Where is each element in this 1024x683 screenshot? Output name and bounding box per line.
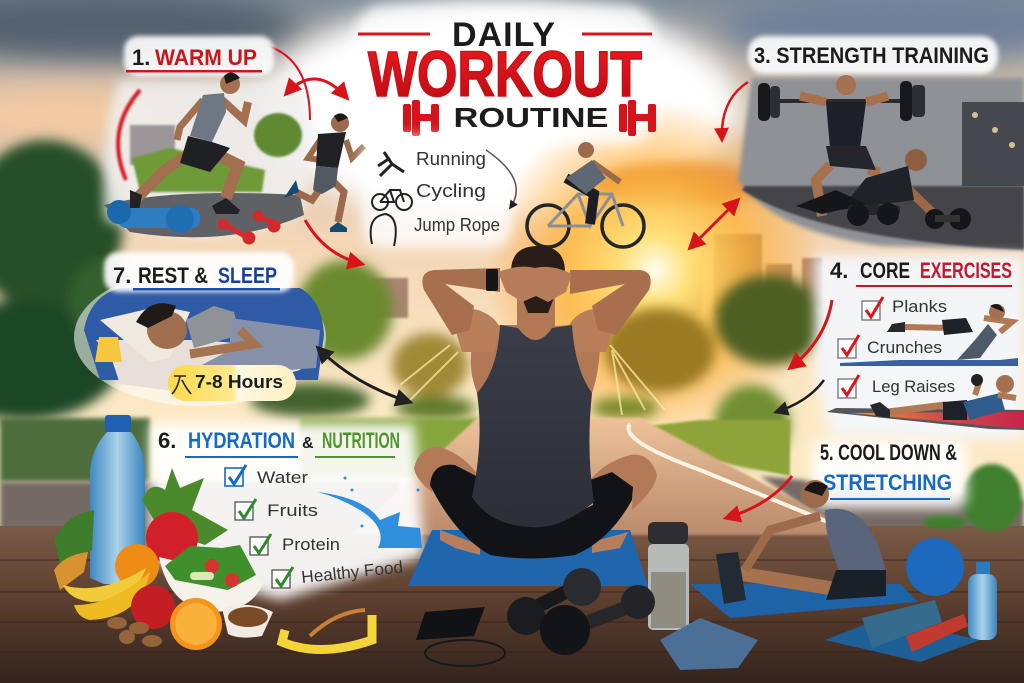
- watch: [486, 269, 498, 291]
- checklist: Crunches: [867, 338, 942, 357]
- icon: mat and towel roll: [825, 600, 980, 662]
- right arm: [570, 270, 651, 335]
- right plant: [923, 464, 1022, 532]
- heading: core exercises: 4.: [830, 258, 848, 283]
- icon: water splash: [318, 476, 422, 548]
- heading: hydration: 6.: [158, 428, 176, 453]
- grey road: [0, 476, 1024, 540]
- heading: core exercises: CORE: [860, 258, 910, 283]
- figure: barbell lifter: [758, 75, 925, 216]
- checklist: [838, 297, 955, 398]
- icon: earphones: [425, 640, 505, 666]
- ground deck: [0, 526, 1024, 683]
- icon: right dumbbell: [619, 100, 656, 136]
- figure: second runner: [284, 113, 364, 232]
- heading: hydration: HYDRATION: [188, 428, 295, 453]
- heading: warm up: [124, 36, 274, 76]
- figure: stretching athlete: [690, 480, 918, 618]
- walkway: [350, 418, 860, 535]
- legs: [414, 447, 480, 492]
- heading: core exercises: [830, 258, 1012, 287]
- cardio list: Running: [416, 149, 486, 169]
- checklist: Water: [257, 468, 308, 487]
- arrow: warm up to centre: [305, 220, 362, 264]
- icon: shaker bottle: [648, 522, 689, 630]
- distant buildings: [372, 234, 822, 318]
- figure: leg raises: [827, 374, 1024, 430]
- cardio list: [362, 136, 512, 248]
- icon: yoga mat: [107, 200, 200, 233]
- checklist: Protein: [282, 535, 340, 554]
- arrow: stretching: [726, 476, 792, 518]
- clasped hands: [498, 267, 572, 302]
- icon: jump rope: [371, 214, 396, 246]
- panel 4: core exercises: [815, 255, 1024, 440]
- panel 6: hydration and nutrition: [150, 424, 424, 600]
- heading: strength training: 3. STRENGTH TRAINING: [754, 43, 989, 68]
- heading: strength training: [748, 36, 998, 74]
- cardio list: Cycling: [416, 181, 486, 201]
- back and shoulders: [471, 296, 600, 393]
- heading: rest and sleep: REST &: [138, 263, 208, 288]
- heading: warm up: WARM UP: [155, 45, 257, 70]
- tank top: [472, 325, 594, 527]
- food pile: [54, 468, 273, 650]
- arrow: core upper: [790, 300, 832, 368]
- sun rays: [400, 345, 665, 415]
- arrow: warm up cycle: [286, 79, 347, 98]
- icon: dumbbells: [507, 568, 655, 655]
- heading: hydration: [158, 428, 400, 458]
- icon: exercise ball: [906, 538, 964, 596]
- icon: running: [378, 152, 404, 176]
- figure: crunches: [840, 304, 1018, 366]
- feet: [440, 530, 628, 555]
- arrow: strength to core: [690, 200, 738, 248]
- badge: 7-8 hours: 7-8 Hours: [195, 372, 283, 392]
- icon: small water bottle: [968, 562, 997, 640]
- arrow: cardio to centre: [486, 150, 516, 208]
- icon: lamp: [95, 337, 122, 362]
- figure: cyclist: [527, 142, 644, 247]
- checklist: Planks: [892, 297, 947, 316]
- panel 5: cool down and stretching: [812, 440, 967, 508]
- checklist: Leg Raises: [872, 377, 955, 396]
- grass: [0, 418, 150, 482]
- title: ROUTINE: [454, 102, 608, 133]
- figure: main runner: [130, 72, 248, 216]
- heading: warm up: 1.: [132, 45, 150, 70]
- checklist: Healthy Food: [300, 557, 404, 587]
- title: WORKOUT: [368, 38, 642, 110]
- panel 3: strength training: [722, 36, 1024, 250]
- head and hair: [511, 246, 565, 313]
- checklist: Fruits: [267, 501, 318, 520]
- heading: hydration: NUTRITION: [322, 428, 400, 453]
- icon: towel: [660, 618, 758, 670]
- figure: sleeper: [100, 303, 320, 382]
- panel 5: cool down and stretching: STRETCHING: [823, 470, 952, 495]
- cardio list: Jump Rope: [414, 215, 500, 235]
- left trees: [0, 140, 475, 420]
- heading: rest and sleep: SLEEP: [218, 263, 277, 288]
- figure: dumbbell row: [796, 149, 971, 230]
- badge: 7-8 hours: [168, 365, 296, 401]
- heading: hydration: &: [302, 435, 314, 452]
- icon: bicycle: [372, 190, 412, 210]
- panel 1: warm up: [104, 36, 312, 244]
- icon: smartphone: [416, 607, 485, 640]
- icon: measuring tape: [282, 610, 372, 650]
- arrow: sleep to centre: [318, 348, 410, 402]
- heading: rest and sleep: 7.: [113, 263, 131, 288]
- arrow: core lower: [776, 380, 824, 412]
- title: [355, 6, 656, 144]
- panel 5: cool down and stretching: 5. COOL DOWN &: [820, 440, 957, 465]
- yoga mat: [408, 530, 648, 586]
- title: DAILY: [452, 16, 556, 54]
- panel 7: rest and sleep: [75, 252, 325, 405]
- shorts: [430, 465, 633, 558]
- checklist: [225, 465, 404, 588]
- icon: left dumbbell: [403, 100, 439, 136]
- right trees: [591, 275, 825, 465]
- heading: rest and sleep: [104, 252, 294, 292]
- icon: water bottle: [90, 415, 145, 584]
- main figure: seated athlete: [408, 246, 657, 586]
- icon: red dumbbells: [218, 211, 280, 244]
- left arm: [422, 268, 500, 335]
